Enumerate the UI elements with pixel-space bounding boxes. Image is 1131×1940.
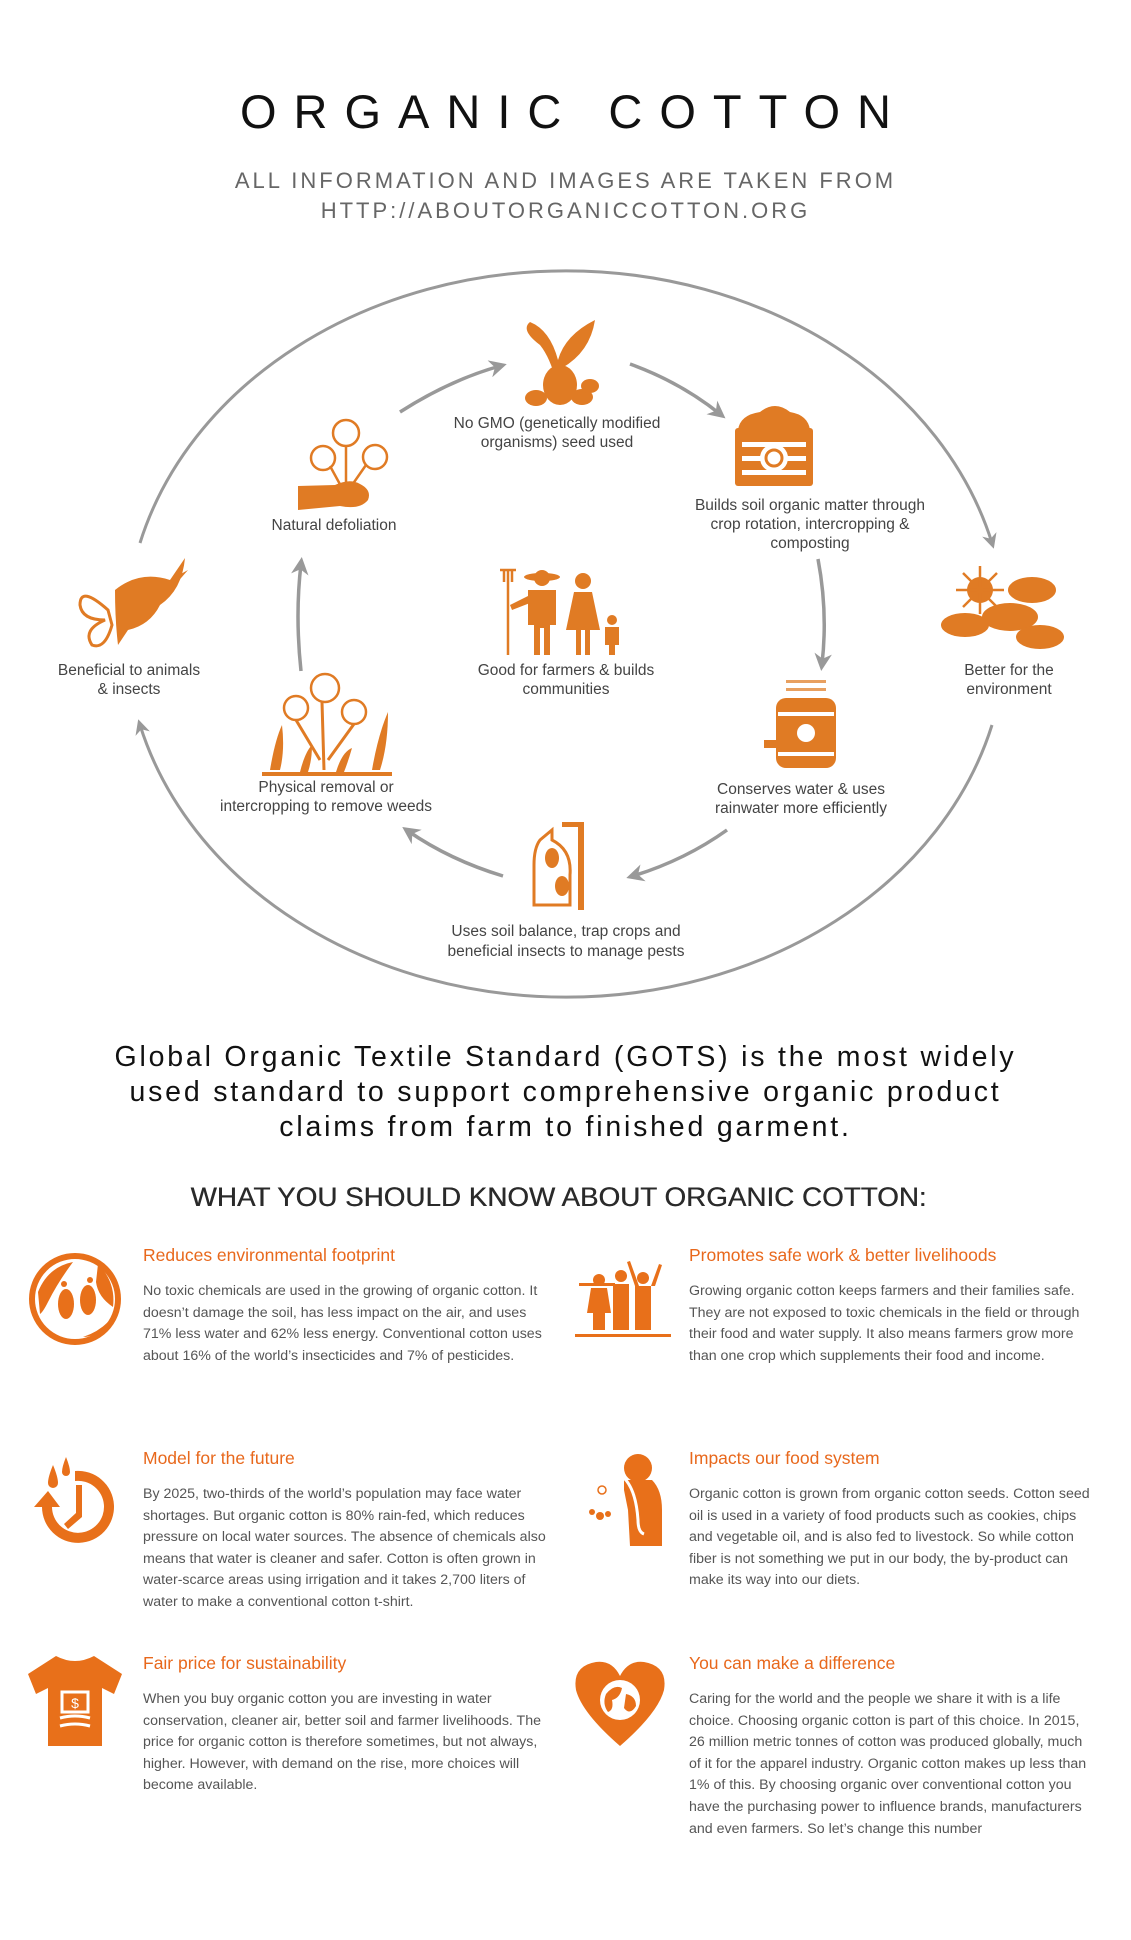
item: food system: Organic cotton is grown from organic cotton seeds. Cotton seed [689,1486,1090,1502]
item: fair price: become available. [143,1777,257,1793]
icon: sun and clouds [941,566,1064,649]
item: model future: means that water is cleaner and safer. Cotton is often grown in [143,1551,536,1567]
label: better env: environment [966,681,1052,698]
icon: rain barrel [764,680,836,768]
label: builds soil: composting [770,535,850,552]
item: make difference [689,1653,1086,1837]
label: better env: Better for the [964,662,1054,679]
item: safe work: They are not exposed to toxic chemicals in the field or through [689,1305,1079,1321]
GOTS statement [115,1041,1016,1143]
arrow: inner 2 [630,364,720,414]
item: safe work [689,1245,1079,1364]
item: make difference: You can make a difference [689,1653,895,1673]
subtitle: HTTP://ABOUTORGANICCOTTON.ORG [321,198,810,223]
label: no GMO: No GMO (genetically modified [454,415,660,432]
item: fair price: conservation, cleaner air, better soil and farmer livelihoods. The [143,1713,541,1729]
item: make difference: Caring for the world and the people we share it with is a life [689,1691,1060,1707]
label: beneficial [58,662,200,698]
icon: hand with cotton [298,420,387,510]
item: food system: make its way into our diets. [689,1572,860,1588]
item: make difference: 26 million metric tonnes of cotton was produced globally, much [689,1734,1082,1750]
title: ORGANIC COTTON [240,85,908,138]
arrow: outer top arc [140,271,992,543]
icon: clock water [34,1457,114,1543]
arrow: inner 1 [400,366,500,412]
icon: flowers and weeds [262,674,392,776]
subtitle [235,168,896,223]
item: food system: and vegetable oil, and is also fed to livestock. So while cotton [689,1529,1074,1545]
item: food system: Impacts our food system [689,1448,880,1468]
label: conserves water: rainwater more efficiently [715,800,887,817]
item: reduces footprint: Reduces environmental footprint [143,1245,395,1265]
icon: t-shirt [28,1656,122,1746]
arrow: inner 5 [408,831,503,876]
item: make difference: 1% of this. By choosing organic over conventional cotton you [689,1777,1072,1793]
item: model future [143,1448,546,1610]
item: fair price: When you buy organic cotton you are investing in water [143,1691,492,1707]
arrow: outer bottom arc [140,725,992,997]
label: pests [448,923,685,960]
subtitle: ALL INFORMATION AND IMAGES ARE TAKEN FROM [235,168,896,193]
item: model future: Model for the future [143,1448,295,1468]
item: reduces footprint [143,1245,542,1364]
label: better env [964,662,1054,698]
item: fair price [143,1653,541,1793]
GOTS statement: used standard to support comprehensive organic product [129,1076,1002,1108]
icon: heart globe [575,1662,665,1746]
arrow: inner 6 [298,564,301,671]
item: safe work: Promotes safe work & better livelihoods [689,1245,996,1265]
item: food system: oil is used in a variety of food products such as cookies, chips [689,1508,1076,1524]
label: beneficial: Beneficial to animals [58,662,200,679]
item: model future: shortages. But organic cotton is 80% rain-fed, which reduces [143,1508,525,1524]
item: make difference: choice. Choosing organic cotton is part of this choice. In 2015, [689,1713,1079,1729]
label: conserves water: Conserves water & uses [717,781,885,798]
item: fair price: higher. However, with demand on the rise, more choices will [143,1756,519,1772]
icon: workers [575,1261,671,1337]
arrow: inner 3 [818,559,824,664]
label: no GMO [454,415,660,451]
label: builds soil: crop rotation, intercropping & [710,516,910,533]
label: beneficial: & insects [98,681,161,698]
section heading: WHAT YOU SHOULD KNOW ABOUT ORGANIC COTTON: [190,1182,926,1212]
label: physical removal: intercropping to remove weeds [220,798,432,815]
item: safe work: Growing organic cotton keeps farmers and their families safe. [689,1283,1075,1299]
label: pests: Uses soil balance, trap crops and [451,923,681,940]
label: builds soil [695,497,925,552]
icon: footprint globe [29,1253,121,1345]
item: model future: By 2025, two-thirds of the world’s population may face water [143,1486,521,1502]
icon: sprout with seeds [525,320,599,406]
item: model future: water-scarce areas using irrigation and it takes 2,700 liters of [143,1572,525,1588]
item: food system [689,1448,1090,1588]
GOTS statement: claims from farm to finished garment. [279,1111,852,1143]
GOTS statement: Global Organic Textile Standard (GOTS) is the most widely [115,1041,1016,1073]
icon: compost box [735,406,813,486]
label: good for farmers: Good for farmers & builds [478,662,655,679]
item: fair price: price for organic cotton is therefore sometimes, but not always, [143,1734,537,1750]
label: good for farmers [478,662,655,698]
icon: trap bottle [534,822,584,910]
item: make difference: and even farmers. So let’s change this number [689,1821,982,1837]
label: no GMO: organisms) seed used [481,434,633,451]
label: physical removal: Physical removal or [258,779,394,796]
label: conserves water [715,781,887,817]
item: fair price: Fair price for sustainability [143,1653,346,1673]
label: natural defoliation: Natural defoliation [272,517,396,534]
label: pests: beneficial insects to manage pests [448,943,685,960]
item: food system: fiber is not something we put in our body, the by-product can [689,1551,1068,1567]
item: model future: pressure on local water sources. The absence of chemicals also [143,1529,546,1545]
arrow: inner 4 [633,830,727,876]
item: safe work: than one crop which supplements their food and income. [689,1348,1045,1364]
item: reduces footprint: No toxic chemicals are used in the growing of organic cotton. It [143,1283,537,1299]
item: safe work: their food and water supply. It also means farmers grow more [689,1326,1074,1342]
item: reduces footprint: 71% less water and 62% less energy. Conventional cotton uses [143,1326,542,1342]
icon: person eating [589,1454,662,1546]
label: good for farmers: communities [522,681,610,698]
item: reduces footprint: about 16% of the world’s insecticides and 7% of pesticides. [143,1348,514,1364]
item: model future: water to make a conventional cotton t-shirt. [143,1594,413,1610]
icon: t-shirt: $ [71,1695,79,1711]
label: physical removal [220,779,432,815]
item: make difference: of it for the apparel industry. Organic cotton makes up less than [689,1756,1086,1772]
item: reduces footprint: doesn’t damage the soil, has less impact on the air, and uses [143,1305,526,1321]
icon: bird and butterfly [80,558,188,646]
cycle diagram [58,269,1064,999]
icon: farmer family [500,570,619,655]
label: builds soil: Builds soil organic matter through [695,497,925,514]
item: make difference: have the purchasing power to influence brands, manufacturers [689,1799,1082,1815]
